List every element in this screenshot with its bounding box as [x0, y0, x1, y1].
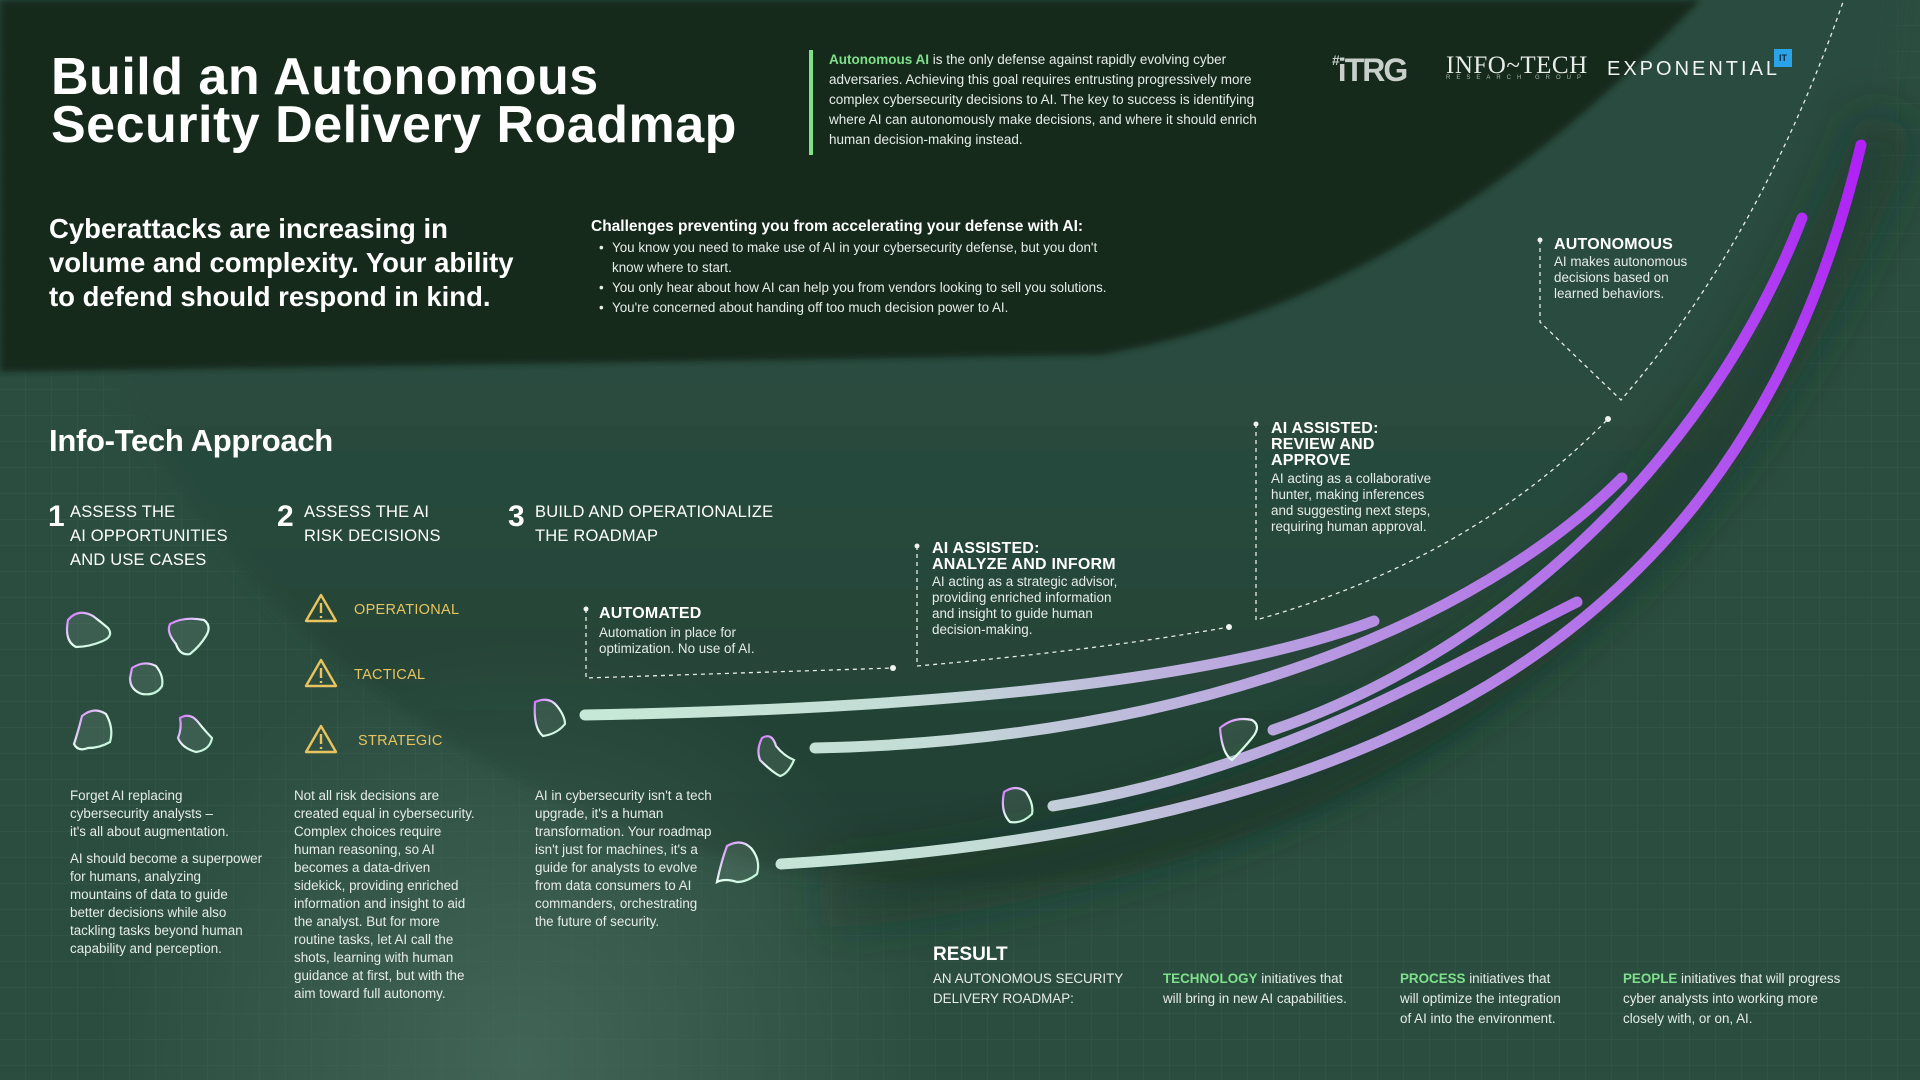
result: technology: will bring in new AI capabilities.: [1163, 991, 1347, 1006]
title: Build an Autonomous: [51, 48, 599, 106]
curves: [585, 145, 1861, 864]
stage: automated: [599, 605, 755, 656]
text: column 3: AI in cybersecurity isn't a tech: [535, 788, 712, 803]
risk levels: STRATEGIC: [358, 733, 443, 749]
text: column 1: it's all about augmentation. AI should become a superpower: [70, 824, 262, 866]
risk levels: OPERATIONAL: [354, 602, 459, 618]
logo: Info-Tech: INFO~TECH: [1446, 52, 1588, 79]
stage: review and approve: requiring human approval.: [1271, 519, 1427, 534]
challenges list: You know you need to make use of AI in your cybersecurity defense, but you don't: [612, 240, 1097, 255]
stage: analyze and inform: and insight to guide human: [932, 606, 1093, 621]
stage: review and approve: APPROVE: [1271, 452, 1351, 469]
logos: [1332, 49, 1792, 88]
intro text block: adversaries. Achieving this goal requires entrusting progressively more: [829, 72, 1251, 87]
stage: analyze and inform: AI acting as a strategic advisor,: [932, 574, 1117, 589]
icon: warning strategic: [304, 724, 338, 754]
text: column 3: guide for analysts to evolve: [535, 860, 697, 875]
challenges list: You're concerned about handing off too much decision power to AI.: [612, 300, 1008, 315]
result: process: will optimize the integration: [1400, 991, 1561, 1006]
stage: autonomous: [1554, 236, 1687, 301]
subtitle: volume and complexity. Your ability: [49, 247, 514, 278]
risk levels: TACTICAL: [354, 667, 425, 683]
result: people: closely with, or on, AI.: [1623, 1011, 1752, 1026]
result: process: PROCESS initiatives that: [1400, 971, 1550, 986]
stage: autonomous: learned behaviors.: [1554, 286, 1664, 301]
text: column 2: the analyst. But for more: [294, 914, 440, 929]
stage: autonomous: AUTONOMOUS: [1554, 236, 1673, 253]
text: column 3: isn't just for machines, it's a: [535, 842, 698, 857]
section heading: Info-Tech Approach: Info-Tech Approach: [49, 423, 333, 458]
challenges list: [591, 218, 1107, 315]
stage: automated: optimization. No use of AI.: [599, 641, 755, 656]
text: column 1: for humans, analyzing: [70, 869, 201, 884]
stage: review and approve: and suggesting next steps,: [1271, 503, 1430, 518]
text: column 2: information and insight to aid: [294, 896, 465, 911]
logo: iTRG: #iTRG: [1332, 52, 1406, 88]
result: process: of AI into the environment.: [1400, 1011, 1556, 1026]
text: column 3: the future of security.: [535, 914, 659, 929]
challenges list: Challenges preventing you from accelerating your defense with AI:: [591, 218, 1083, 235]
result: technology: [1163, 971, 1347, 1006]
icon: warning tactical: [304, 658, 338, 688]
text: column 1: mountains of data to guide: [70, 887, 228, 902]
step 1 heading: AND USE CASES: [70, 551, 206, 569]
intro text block: Autonomous AI is the only defense against rapidly evolving cyber: [829, 52, 1226, 67]
result section: AN AUTONOMOUS SECURITY: [933, 971, 1123, 986]
step 1 heading: AI OPPORTUNITIES: [70, 527, 228, 545]
stage: analyze and inform: decision-making.: [932, 622, 1032, 637]
stage: autonomous: decisions based on: [1554, 270, 1669, 285]
text: column 2: [294, 788, 475, 1001]
step 2 heading: [277, 500, 441, 545]
logo: Exponential: EXPONENTIAL: [1607, 58, 1780, 80]
connectors: [586, 2, 1843, 678]
text: column 1: capability and perception.: [70, 941, 222, 956]
result: people: cyber analysts into working more: [1623, 991, 1818, 1006]
text: column 3: upgrade, it's a human: [535, 806, 663, 821]
bubbles on curves: [535, 700, 1257, 882]
step 3 heading: [508, 500, 773, 545]
result heading: RESULT: [933, 944, 1008, 965]
challenges list: know where to start.: [612, 260, 732, 275]
icon: warning operational: [304, 594, 338, 622]
text: column 2: guidance at first, but with the: [294, 968, 464, 983]
subtitle: Cyberattacks are increasing in: [49, 213, 448, 244]
step 1 heading: [48, 500, 228, 569]
subtitle: [49, 213, 514, 312]
subtitle: to defend should respond in kind.: [49, 281, 491, 312]
challenges list: You only hear about how AI can help you from vendors looking to sell you solutions.: [612, 280, 1107, 295]
text: column 1: [70, 788, 262, 956]
intro text block: complex cybersecurity decisions to AI. The key to success is identifying: [829, 92, 1254, 107]
title: Security Delivery Roadmap: [51, 96, 737, 154]
step 1 heading: ASSESS THE: [70, 503, 175, 521]
result section: [933, 944, 1840, 1026]
challenges list: •: [599, 300, 604, 315]
stage: analyze and inform: providing enriched information: [932, 590, 1111, 605]
text: column 2: routine tasks, let AI call the: [294, 932, 453, 947]
text: column 2: Not all risk decisions are: [294, 788, 439, 803]
icon: IT badge: [1774, 49, 1792, 67]
text: column 2: human reasoning, so AI: [294, 842, 435, 857]
step 2 heading: 2: [277, 500, 294, 533]
stage: automated: Automation in place for: [599, 625, 736, 640]
stage: analyze and inform: [932, 540, 1117, 637]
result: people: PEOPLE initiatives that will progress: [1623, 971, 1840, 986]
logo: Info-Tech: RESEARCH GROUP: [1446, 75, 1587, 81]
result: technology: TECHNOLOGY initiatives that: [1163, 971, 1342, 986]
text: column 2: becomes a data-driven: [294, 860, 430, 875]
text: column 3: [535, 788, 712, 929]
text: column 1: Forget AI replacing: [70, 788, 182, 803]
text: column 2: Complex choices require: [294, 824, 441, 839]
step 3 heading: 3: [508, 500, 525, 533]
title: [51, 48, 737, 154]
stage: analyze and inform: AI ASSISTED:: [932, 540, 1040, 557]
text: column 1: better decisions while also: [70, 905, 226, 920]
step 2 heading: RISK DECISIONS: [304, 527, 441, 545]
text: column 2: created equal in cybersecurity.: [294, 806, 475, 821]
text: column 2: shots, learning with human: [294, 950, 453, 965]
text: column 2: sidekick, providing enriched: [294, 878, 458, 893]
intro text block: [809, 50, 1289, 155]
stage: automated: AUTOMATED: [599, 605, 702, 622]
stage: review and approve: [1271, 420, 1431, 534]
risk levels: [304, 594, 459, 754]
intro text block: human decision-making instead.: [829, 132, 1023, 147]
icon: IT badge: IT: [1779, 53, 1787, 63]
text: column 1: tackling tasks beyond human: [70, 923, 243, 938]
text: column 3: from data consumers to AI: [535, 878, 691, 893]
text: column 1: cybersecurity analysts –: [70, 806, 213, 821]
result: process: [1400, 971, 1561, 1026]
challenges list: •: [599, 240, 604, 255]
stage: review and approve: AI acting as a collaborative: [1271, 471, 1431, 486]
text: column 3: commanders, orchestrating: [535, 896, 697, 911]
text: column 2: aim toward full autonomy.: [294, 986, 446, 1001]
result section: DELIVERY ROADMAP:: [933, 991, 1074, 1006]
step 3 heading: BUILD AND OPERATIONALIZE: [535, 503, 773, 521]
stage: analyze and inform: ANALYZE AND INFORM: [932, 556, 1116, 573]
stage: autonomous: AI makes autonomous: [1554, 254, 1687, 269]
step 3 heading: THE ROADMAP: [535, 527, 658, 545]
step 2 heading: ASSESS THE AI: [304, 503, 429, 521]
stage: review and approve: AI ASSISTED:: [1271, 420, 1379, 437]
text: column 3: transformation. Your roadmap: [535, 824, 711, 839]
step 1 heading: 1: [48, 500, 65, 533]
result: people: [1623, 971, 1840, 1026]
stage: review and approve: hunter, making inferences: [1271, 487, 1424, 502]
challenges list: •: [599, 280, 604, 295]
intro text block: where AI can autonomously make decisions, and where it should enrich: [829, 112, 1257, 127]
stage: review and approve: REVIEW AND: [1271, 436, 1375, 453]
